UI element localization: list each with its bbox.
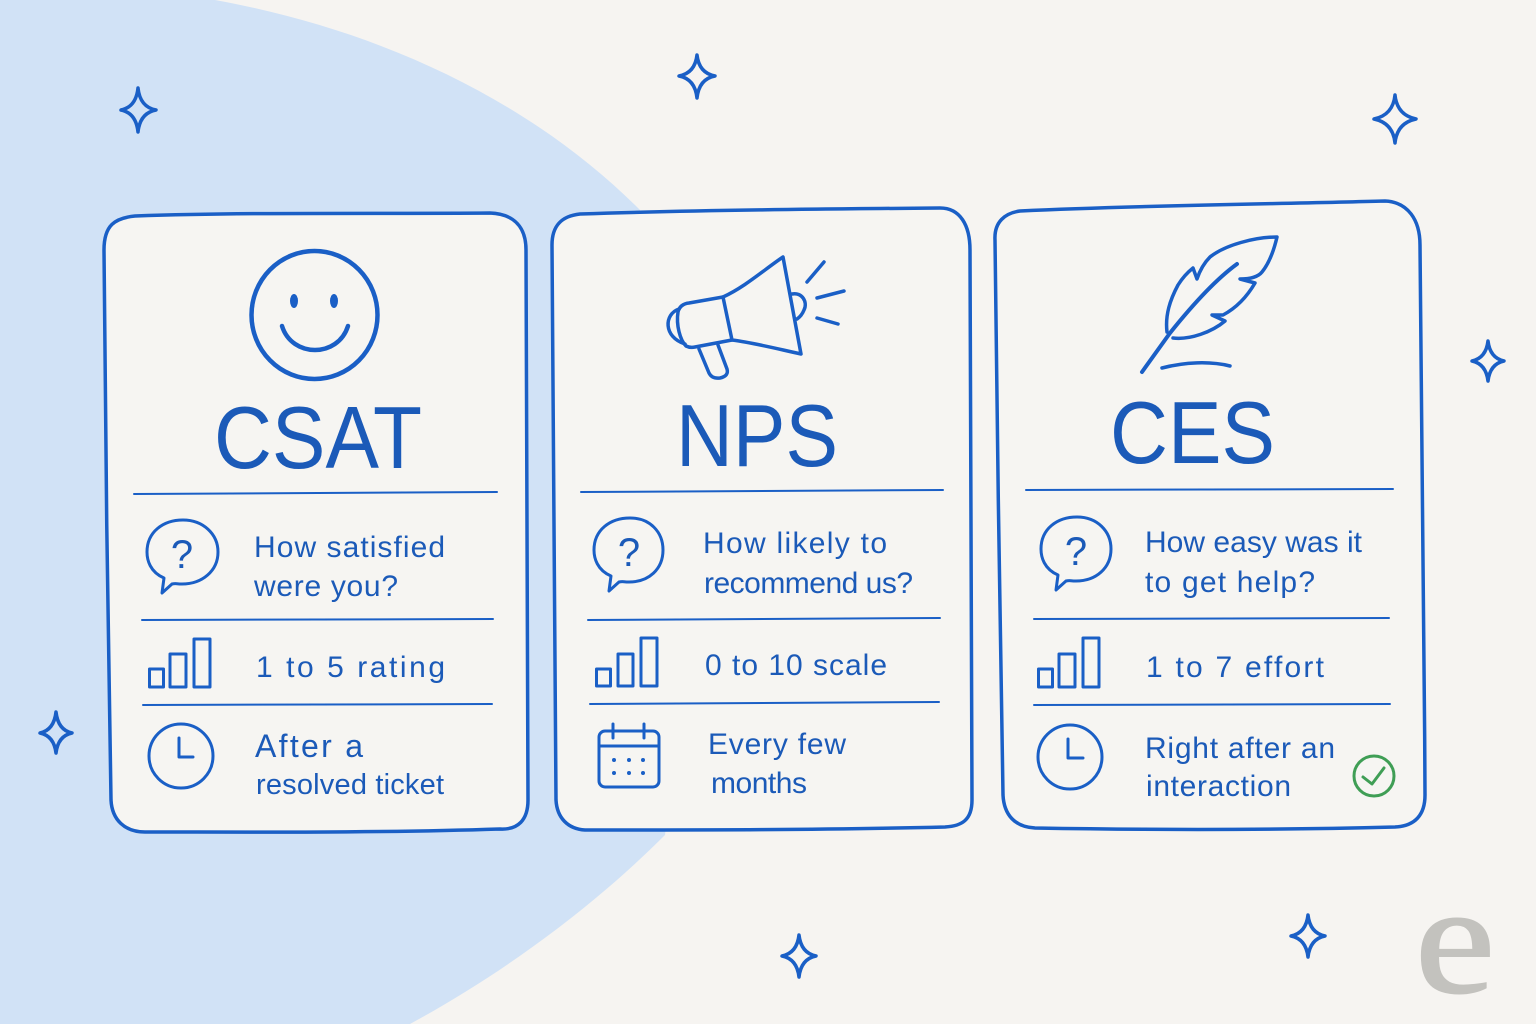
icon: clock: [1038, 725, 1102, 789]
dividers: [1026, 489, 1393, 705]
heading: CSAT: CSAT: [214, 388, 422, 487]
icon: question bubble: [147, 520, 218, 593]
heading: CES: CES: [1110, 383, 1275, 482]
NPS card outline: [552, 208, 972, 830]
question mark: ?: [1065, 530, 1087, 574]
text: question: recommend us?: [704, 567, 913, 600]
text: timing: Every few: [708, 728, 846, 761]
text: timing: Right after an: [1145, 732, 1335, 765]
text: question: [1145, 526, 1363, 599]
text: timing: [255, 728, 444, 801]
question mark: ?: [618, 531, 640, 575]
icon: bars: [1038, 638, 1099, 687]
icon: green check: [1354, 756, 1394, 796]
text: question: to get help?: [1145, 566, 1315, 599]
CES card outline: [995, 201, 1425, 829]
text: question: How easy was it: [1145, 526, 1363, 559]
question mark: ?: [171, 533, 193, 577]
icon: question bubble: [1041, 517, 1111, 590]
icon: calendar: [599, 724, 659, 787]
icon: feather: [1142, 237, 1277, 372]
text: question: How satisfied: [254, 531, 445, 564]
text: question: [703, 527, 913, 600]
icon: smiley: [252, 251, 378, 379]
text: timing: [708, 728, 846, 800]
icon: clock: [149, 724, 213, 788]
heading: NPS: NPS: [676, 386, 838, 485]
text: timing: months: [711, 767, 807, 800]
text: timing: After a: [255, 728, 363, 764]
text: timing: resolved ticket: [256, 769, 444, 801]
background blue circle: [0, 0, 700, 1024]
text: scale: 0 to 10 scale: [705, 649, 887, 682]
panel: CES: [995, 201, 1425, 829]
text: timing: interaction: [1146, 770, 1291, 803]
watermark letter e: e: [1415, 853, 1495, 1024]
text: scale: 1 to 5 rating: [256, 651, 445, 684]
CSAT card outline: [104, 213, 528, 832]
icon: bars: [596, 638, 657, 686]
panel: NPS: [552, 208, 972, 830]
icon: question bubble: [594, 518, 663, 591]
text: timing: [1145, 732, 1335, 803]
panel: CSAT: [104, 213, 528, 832]
text: question: were you?: [253, 570, 398, 603]
dividers: [134, 492, 497, 705]
dividers: [581, 490, 943, 704]
text: question: [253, 531, 445, 603]
icon: megaphone: [668, 257, 844, 378]
icon: bars: [150, 639, 210, 687]
text: scale: 1 to 7 effort: [1146, 651, 1325, 684]
text: question: How likely to: [703, 527, 887, 560]
